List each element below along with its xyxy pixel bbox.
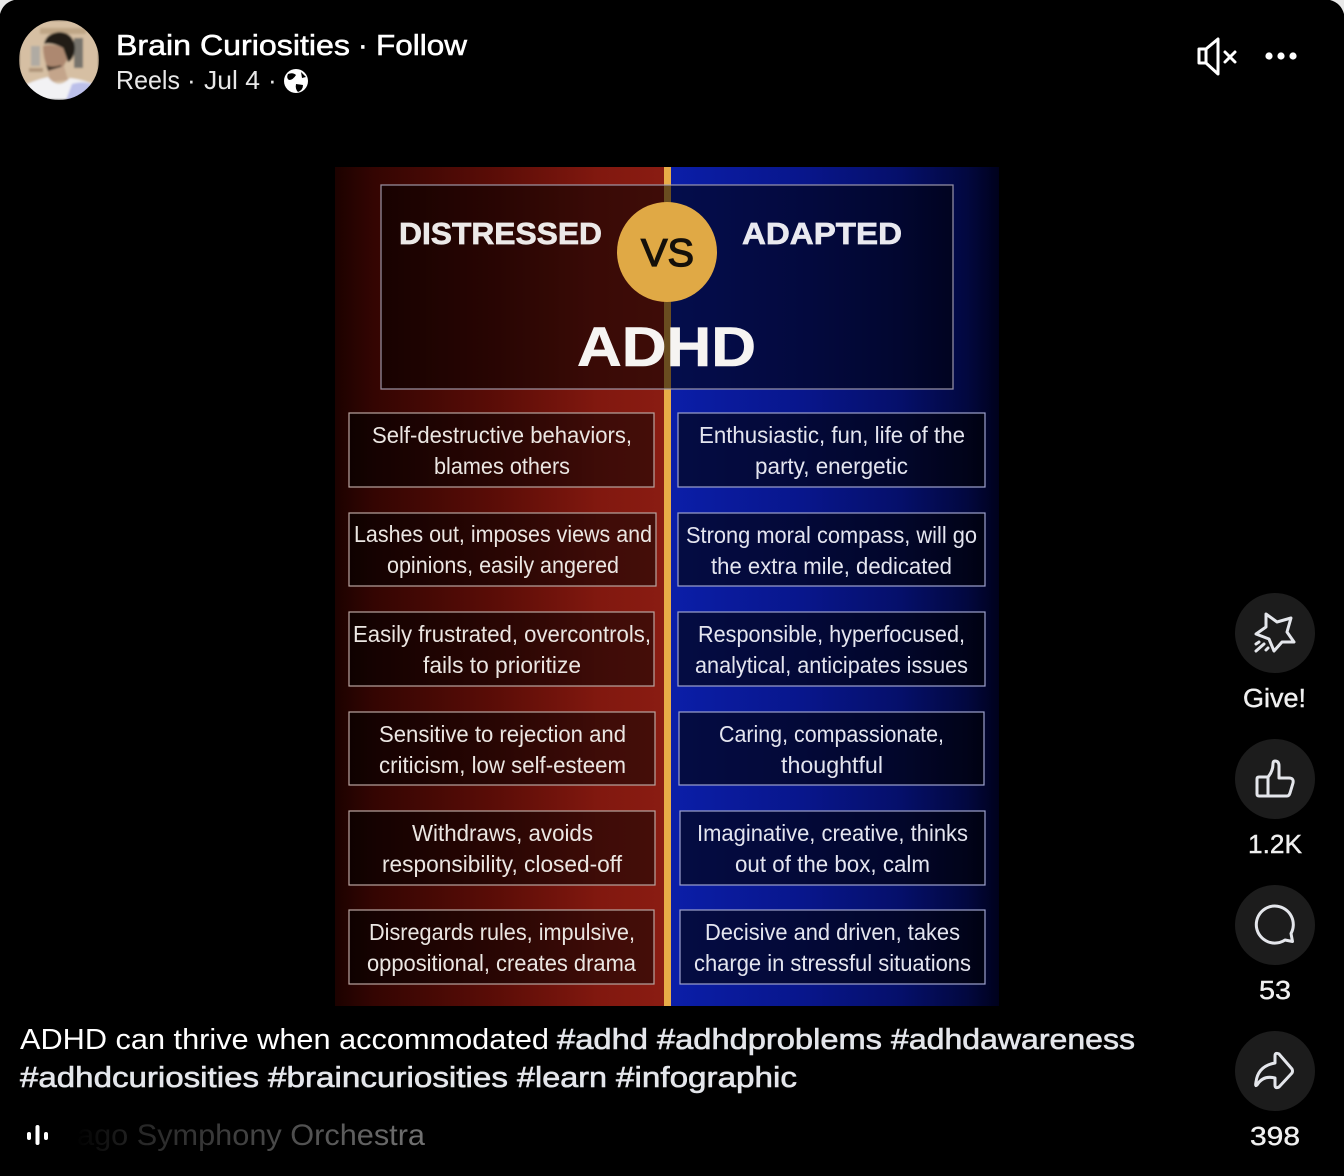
button: give <box>1235 593 1315 713</box>
trait box 1: Enthusiastic, fun, life of the <box>699 422 965 448</box>
panel: infographic <box>335 167 999 1006</box>
trait box 6: Decisive and driven, takes <box>705 919 960 945</box>
post meta: · <box>187 65 196 95</box>
window corners <box>0 0 1344 14</box>
trait box 3: Responsible, hyperfocused, <box>698 621 965 647</box>
trait box 1: blames others <box>434 453 570 479</box>
post meta: · <box>268 65 277 95</box>
label: Give! <box>1243 685 1306 713</box>
trait box 4: Sensitive to rejection and <box>379 721 626 747</box>
trait box 5: out of the box, calm <box>735 851 930 877</box>
label: 53 <box>1259 977 1291 1005</box>
trait box 5 <box>680 811 985 885</box>
trait box 1: Self-destructive behaviors, <box>372 422 632 448</box>
trait box 6: oppositional, creates drama <box>367 950 637 976</box>
trait box 5: responsibility, closed-off <box>382 851 622 877</box>
trait box 4 <box>679 712 984 785</box>
trait box 1 <box>678 413 985 487</box>
icon: thumbs up <box>1257 761 1293 796</box>
page name: Follow <box>376 30 468 62</box>
panel: blue side background <box>671 167 999 1006</box>
center divider <box>664 167 671 1006</box>
trait box 2 <box>349 513 656 586</box>
caption: #adhdawareness <box>891 1024 1135 1056</box>
icon: star <box>1256 614 1294 651</box>
caption: #braincuriosities <box>268 1062 508 1094</box>
trait box 2: Strong moral compass, will go <box>686 522 977 548</box>
panel: red side background <box>335 167 664 1006</box>
trait box 3: fails to prioritize <box>423 652 581 678</box>
trait box 2 <box>678 513 985 586</box>
VS badge: VS <box>641 232 694 275</box>
label: 398 <box>1250 1123 1300 1151</box>
button: like <box>1235 739 1315 859</box>
heading: distressed: DISTRESSED <box>399 216 602 251</box>
trait box 6 <box>680 910 985 984</box>
label: 1.2K <box>1248 831 1302 859</box>
trait box 2: opinions, easily angered <box>387 552 619 578</box>
trait box 3 <box>678 612 985 686</box>
trait box 2: Lashes out, imposes views and <box>354 521 652 547</box>
right column: adapted traits <box>678 413 985 984</box>
page name: · <box>358 30 368 62</box>
icon: muted speaker <box>1199 39 1235 74</box>
caption: #infographic <box>616 1062 797 1094</box>
trait box 5: Imaginative, creative, thinks <box>697 820 968 846</box>
trait box 4: Caring, compassionate, <box>719 721 944 747</box>
trait box 4: criticism, low self-esteem <box>379 752 626 778</box>
post meta: Reels <box>116 65 180 95</box>
caption: #adhd <box>557 1024 648 1056</box>
left column: distressed traits <box>349 413 656 984</box>
icon: more dots <box>1265 52 1297 60</box>
trait box 6: charge in stressful situations <box>694 950 971 976</box>
trait box 5: Withdraws, avoids <box>412 820 593 846</box>
title: ADHD: ADHD <box>577 315 756 378</box>
post meta: Jul 4 <box>204 65 260 95</box>
trait box 3 <box>349 612 654 686</box>
button: comment <box>1235 885 1315 1005</box>
icon: audio bars <box>27 1125 48 1145</box>
VS badge <box>617 202 717 302</box>
icon: globe <box>284 69 308 93</box>
caption: #adhdcuriosities <box>20 1062 259 1094</box>
caption: ADHD can thrive when accommodated <box>20 1024 549 1056</box>
profile avatar <box>19 20 99 100</box>
trait box 6 <box>349 910 654 984</box>
trait box 3: analytical, anticipates issues <box>695 652 968 678</box>
button: share <box>1235 1031 1315 1151</box>
trait box 4 <box>349 712 655 785</box>
caption: #learn <box>517 1062 607 1094</box>
page name: Brain Curiosities <box>116 30 350 62</box>
trait box 3: Easily frustrated, overcontrols, <box>353 621 651 647</box>
trait box 1: party, energetic <box>755 453 908 479</box>
icon: speech bubble <box>1256 906 1293 943</box>
post meta <box>116 65 277 95</box>
page name <box>116 30 468 62</box>
trait box 6: Disregards rules, impulsive, <box>369 919 635 945</box>
trait box 1 <box>349 413 654 487</box>
trait box 5 <box>349 811 655 885</box>
music label: ago Symphony Orchestra <box>77 1119 425 1152</box>
caption <box>20 1024 1135 1094</box>
header box <box>381 185 953 389</box>
trait box 4: thoughtful <box>781 752 883 778</box>
icon: arrow <box>1256 1053 1292 1088</box>
caption: #adhdproblems <box>657 1024 882 1056</box>
heading: adapted: ADAPTED <box>742 216 902 251</box>
trait box 2: the extra mile, dedicated <box>711 553 952 579</box>
